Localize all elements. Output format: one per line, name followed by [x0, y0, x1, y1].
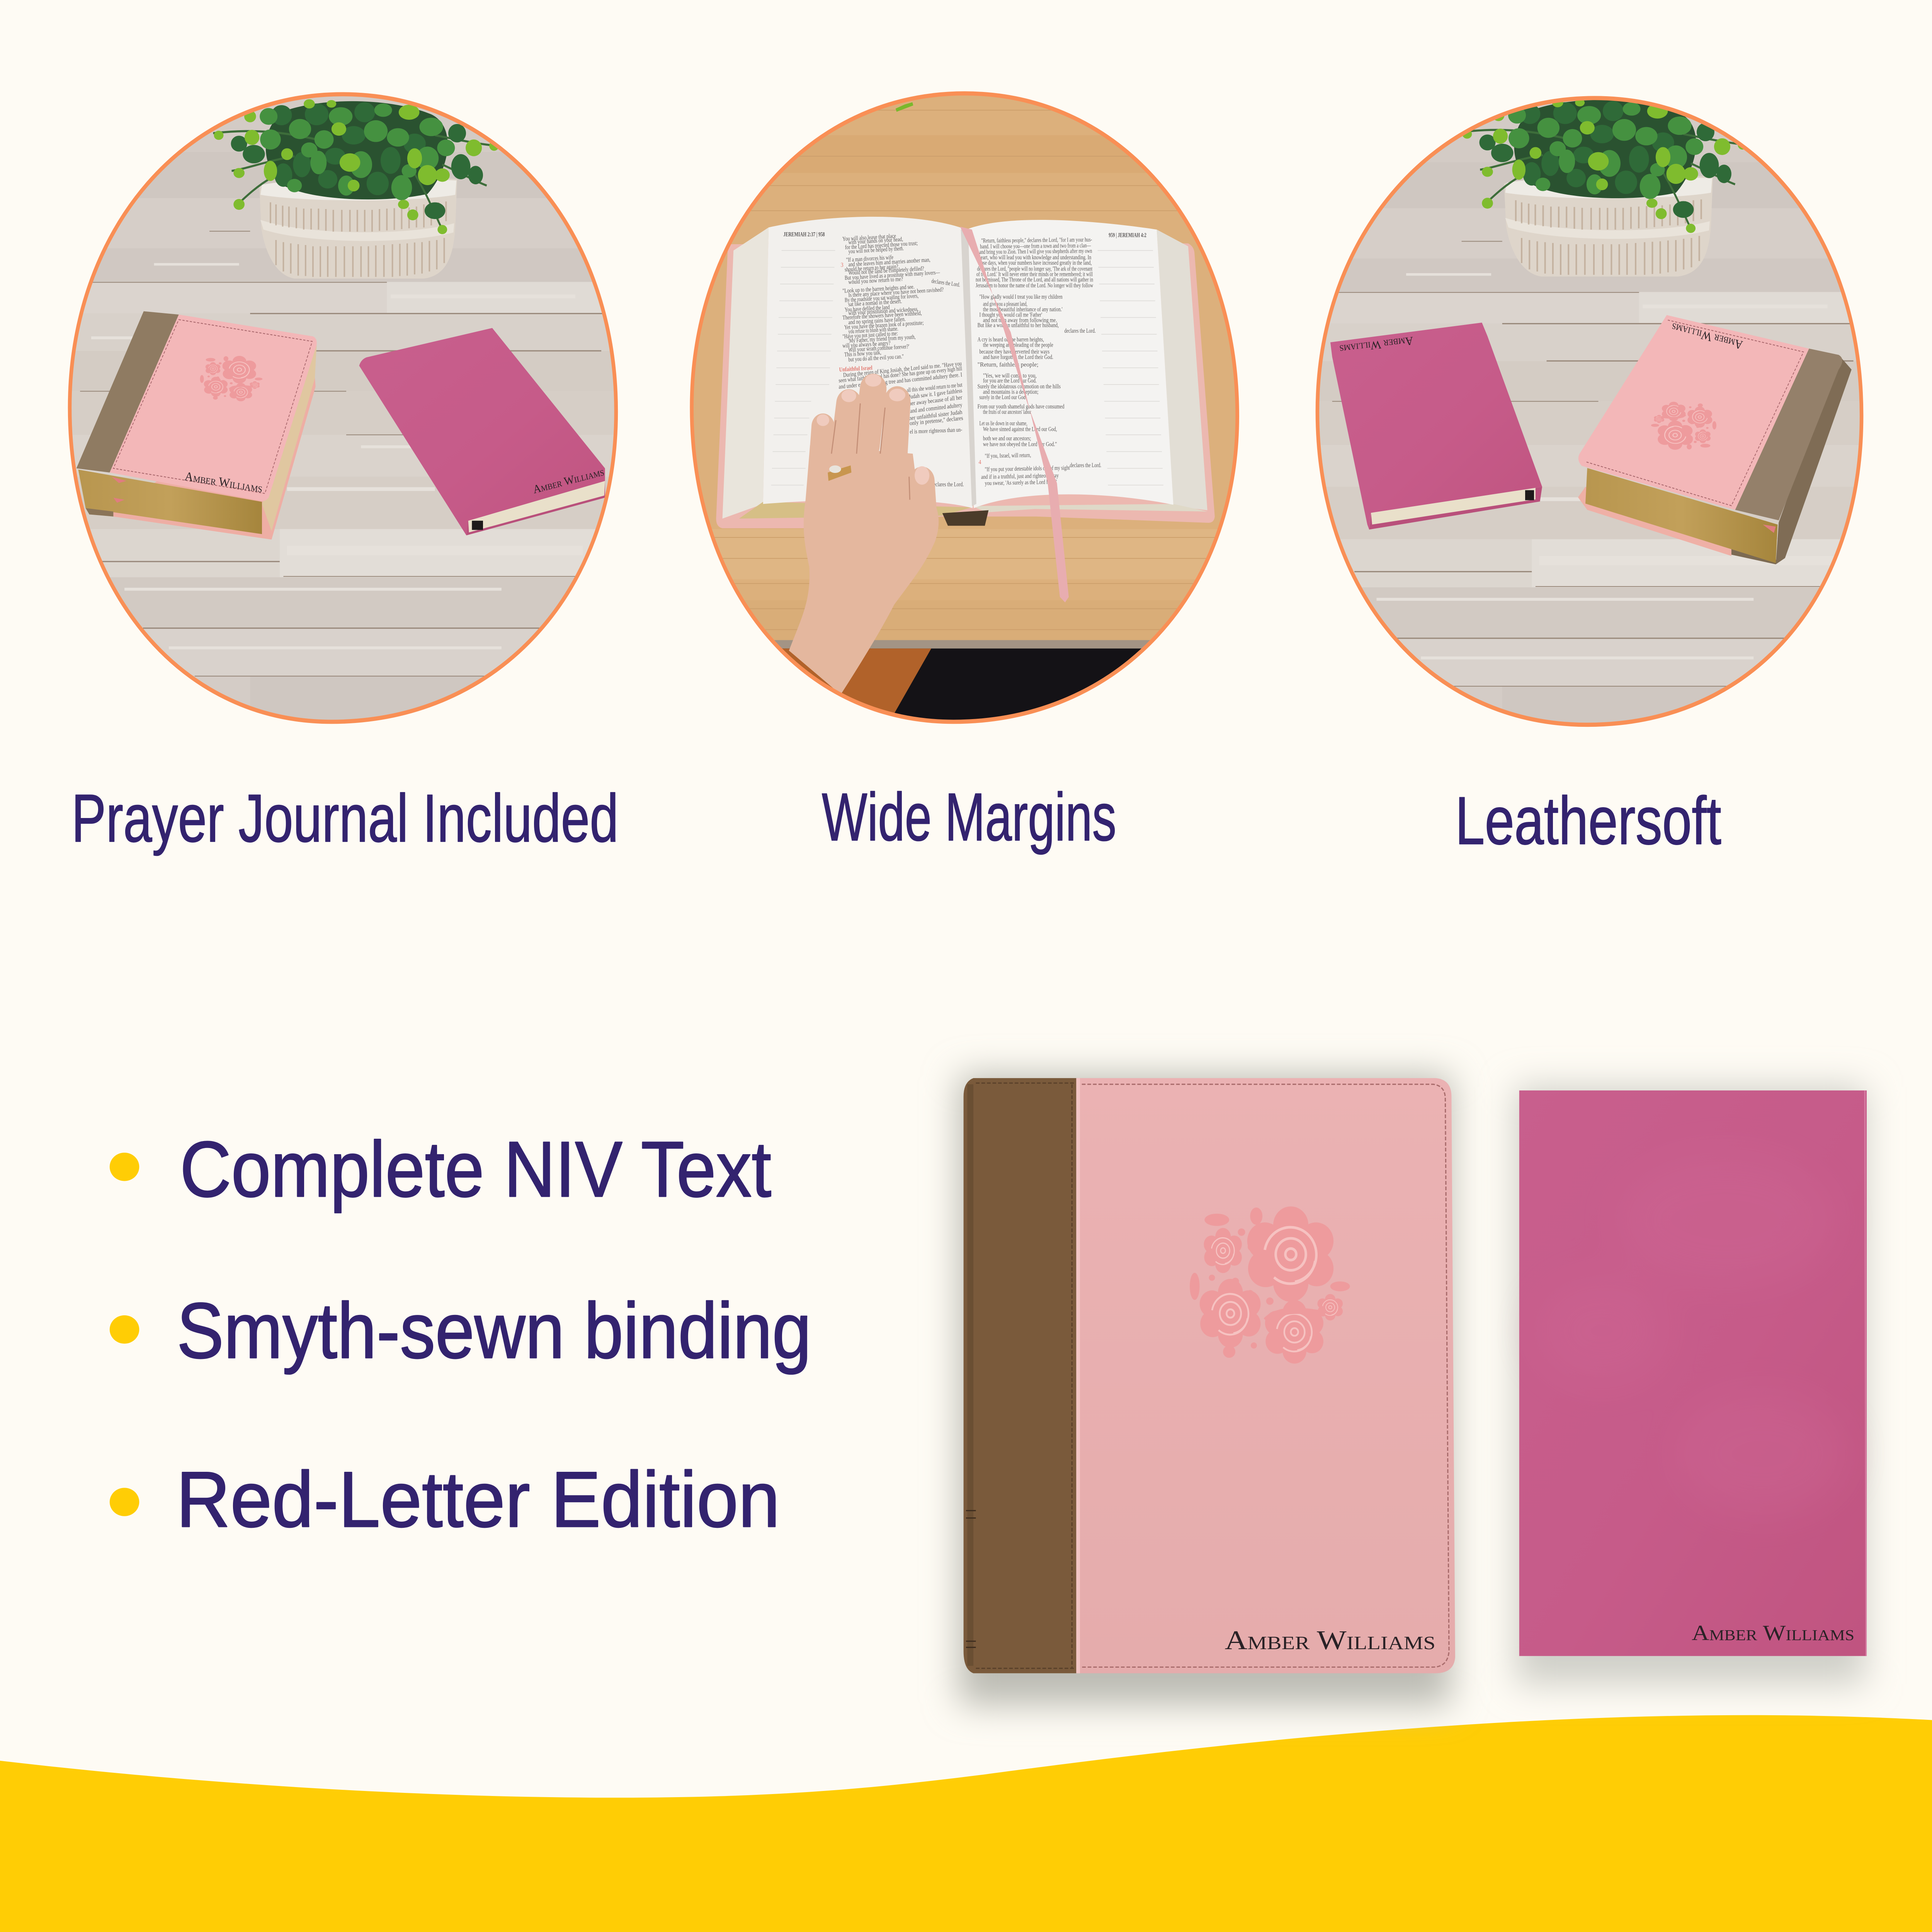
left page text: Will your wrath continue forever?' [848, 344, 910, 354]
left page text: sister Judah saw it. I gave faithless [898, 388, 963, 402]
left page text: "Have you not just called to me: [842, 330, 898, 340]
Bible, front view [964, 1078, 1455, 1673]
left page text: will you always be angry? [842, 340, 891, 349]
right page text: heart, who will lead you with knowledge and understanding. In [979, 254, 1092, 261]
right page text: surely in the Lord our God [979, 394, 1026, 401]
left page text: Therefore the showers have been withheld, [842, 310, 922, 321]
right page text: "If you, Israel, will return, [985, 452, 1031, 459]
right page text: and have forgotten the Lord their God. [983, 354, 1053, 361]
left page text: done all this she would return to me but [898, 382, 963, 395]
photo: leathersoft books on a wooden table [1310, 95, 1889, 752]
right page text [976, 232, 1146, 487]
left page text: declares the Lord. [931, 278, 961, 288]
left page text: "If a man divorces his wife [846, 254, 894, 264]
feature: Smyth-sewn binding: Smyth-sewn binding [177, 1287, 811, 1375]
pink notebook [359, 328, 605, 536]
orange photo outline [1317, 98, 1862, 725]
engraved name: Amber Williams [1670, 320, 1744, 352]
right page text: We have sinned against the Lord our God, [983, 426, 1057, 433]
right page text: 959 | JEREMIAH 4:2 [1109, 232, 1146, 239]
oak table [676, 85, 1256, 732]
right page text: "Return, faithless people," declares the Lord, "for I am your hus- [981, 236, 1092, 244]
right page text: declares the Lord, "people will no longer say, 'The ark of the covenant [977, 266, 1093, 272]
wave footer [0, 1715, 1932, 1932]
pink and brown Bible [77, 311, 317, 539]
engraved name: Amber Williams [532, 465, 605, 496]
left page text: During the reign of King Josiah, the Lord said to me. "Have you [843, 361, 962, 379]
right page text: A cry is heard on the barren heights, [978, 337, 1044, 343]
right page text: declares the Lord. [1064, 328, 1096, 334]
plant pot [259, 177, 457, 279]
left page text: 'My Father, my friend from my youth, [848, 334, 916, 344]
shadow: Bible [959, 1075, 1451, 1705]
open Bible [716, 217, 1215, 602]
right page text: both we and our ancestors; [983, 435, 1031, 442]
shadow: notebook [1515, 1087, 1866, 1684]
left page text: Unfaithful Israel [839, 365, 872, 373]
left page text: land and committed adultery [909, 402, 963, 415]
left page text: and under every spreading tree and has committed adultery there. I [838, 372, 963, 390]
bullet dot 3 [110, 1488, 139, 1516]
right page text: the fruits of our ancestors' labor [983, 409, 1031, 415]
right page text: and not turn away from following me. [983, 317, 1057, 324]
right page text: I thought you would call me 'Father' [979, 312, 1042, 318]
feature: Complete NIV Text: Complete NIV Text [180, 1125, 771, 1213]
right page text: the weeping and pleading of the people [983, 342, 1053, 349]
left page text: Would not the land be completely defiled? [848, 265, 924, 276]
heading: Prayer Journal Included: Prayer Journal Included [71, 781, 619, 856]
plant [213, 99, 499, 234]
right page text: Surely the idolatrous commotion on the hills [978, 383, 1061, 390]
heading: Leathersoft: Leathersoft [1455, 783, 1721, 859]
plant pot [1504, 175, 1713, 277]
right page text: Let us lie down in our shame, [979, 420, 1027, 427]
wooden table [1310, 95, 1889, 752]
feature: Red-Letter Edition: Red-Letter Edition [176, 1456, 780, 1544]
left page text: for the Lord has rejected those you trust; [845, 240, 918, 251]
left page text: seen what faithless Israel has done? She has gone up on every high hill [838, 365, 962, 384]
left page text: only in pretense," declares [910, 415, 963, 427]
right page text: But like a woman unfaithful to her husband, [978, 322, 1059, 329]
engraved name: Amber Williams [184, 469, 263, 495]
left page text: You will also leave that place [842, 233, 896, 243]
icon: rose emboss [200, 356, 262, 401]
left page text: you refuse to blush with shame. [848, 326, 898, 335]
right page text: "Yes, we will come to you, [983, 372, 1037, 379]
left page text: but you do all the evil you can." [848, 353, 904, 363]
left page text: You have defiled the land [845, 304, 890, 313]
right page text: we have not obeyed the Lord our God." [983, 441, 1057, 448]
right page text: band. I will choose you—one from a town and two from a clan— [980, 242, 1091, 250]
pink and brown Bible [1578, 315, 1852, 564]
left page text: you will not be helped by them. [848, 245, 904, 255]
engraved name: Amber Williams [1339, 334, 1414, 356]
left page text: But you have lived as a prostitute with many lovers— [845, 269, 940, 281]
right page text: "How gladly would I treat you like my children [979, 294, 1063, 300]
notebook, front view [1519, 1090, 1867, 1656]
right page text: "If you put your detestable idols out of my sight [985, 465, 1070, 473]
left page text: 3 [841, 262, 844, 269]
pink notebook [1330, 323, 1542, 529]
right page text: 4 [979, 459, 981, 466]
left page text: and she leaves him and marries another man, [848, 257, 930, 268]
left page text: el is more righteous than un- [910, 427, 963, 435]
right page text: "Return, faithless people; [978, 362, 1038, 368]
heading: Wide Margins: Wide Margins [822, 779, 1116, 855]
orange photo outline [692, 94, 1237, 722]
photo: open Bible with hand on oak table [676, 85, 1256, 732]
plant [1462, 98, 1747, 233]
bullet dot 2 [110, 1315, 139, 1344]
right page text: and give you a pleasant land, [983, 301, 1027, 308]
right page text: because they have perverted their ways [979, 349, 1049, 355]
right page text: you swear, 'As surely as the Lord lives,' [985, 479, 1057, 487]
right page text: the most beautiful inheritance of any nation.' [983, 306, 1063, 313]
ribbon bookmark [960, 226, 1069, 602]
left page text: should he return to her again? [845, 264, 898, 273]
orange photo outline [70, 94, 616, 722]
left page text: JEREMIAH 2:37 | 958 [783, 231, 825, 238]
hand [789, 374, 939, 695]
left page text: declares the Lord. [931, 481, 964, 488]
right page text: and bring you to Zion. Then I will give you shepherds after my own [979, 248, 1092, 255]
left page text: would you now return to me? [848, 276, 903, 286]
engraved name: Amber Williams [1225, 1625, 1435, 1655]
icon: rose emboss [1190, 1206, 1350, 1364]
bullet list [110, 1125, 811, 1544]
right page text: those days, when your numbers have increased greatly in the land, [978, 260, 1092, 266]
right page text: declares the Lord. [1070, 462, 1101, 469]
engraved name: Amber Williams [1692, 1621, 1854, 1645]
left page text: sat like a nomad in the desert. [848, 298, 902, 308]
bullet dot 1 [110, 1153, 139, 1181]
right page text: From our youth shameful gods have consumed [978, 403, 1065, 410]
left page text: her away because of all her [909, 394, 963, 407]
right page text: for you are the Lord our God. [983, 378, 1037, 384]
left page text: "Look up to the barren heights and see. [842, 284, 915, 294]
left page text: By the roadside you sat waiting for lovers, [845, 293, 918, 304]
wooden table [71, 96, 614, 720]
left page text: This is how you talk, [844, 349, 881, 358]
right page text: of the Lord.' It will never enter their minds or be remembered; it will [976, 271, 1093, 278]
left page text: Is there any place where you have not been ravished? [848, 286, 944, 299]
left page text: and no spring rains have fallen. [848, 316, 906, 326]
right page text: and if in a truthful, just and righteous way [981, 472, 1059, 480]
left page text: Yet you have the brazen look of a prostitute; [844, 320, 924, 331]
icon: rose emboss [1651, 402, 1716, 450]
left page text [783, 231, 964, 488]
photo: prayer journal books on a wooden table [58, 85, 638, 742]
right page text: Jerusalem to honor the name of the Lord. No longer will they follow [976, 282, 1093, 289]
right page text: and mountains is a deception; [983, 389, 1038, 395]
left page text: with your hands on your head, [848, 236, 903, 246]
left page text: with your prostitution and wickedness. [848, 306, 918, 316]
right page text: not be missed, The Throne of the Lord, and all nations will gather in [976, 277, 1094, 283]
left page text: her unfaithful sister Judah [909, 409, 963, 422]
